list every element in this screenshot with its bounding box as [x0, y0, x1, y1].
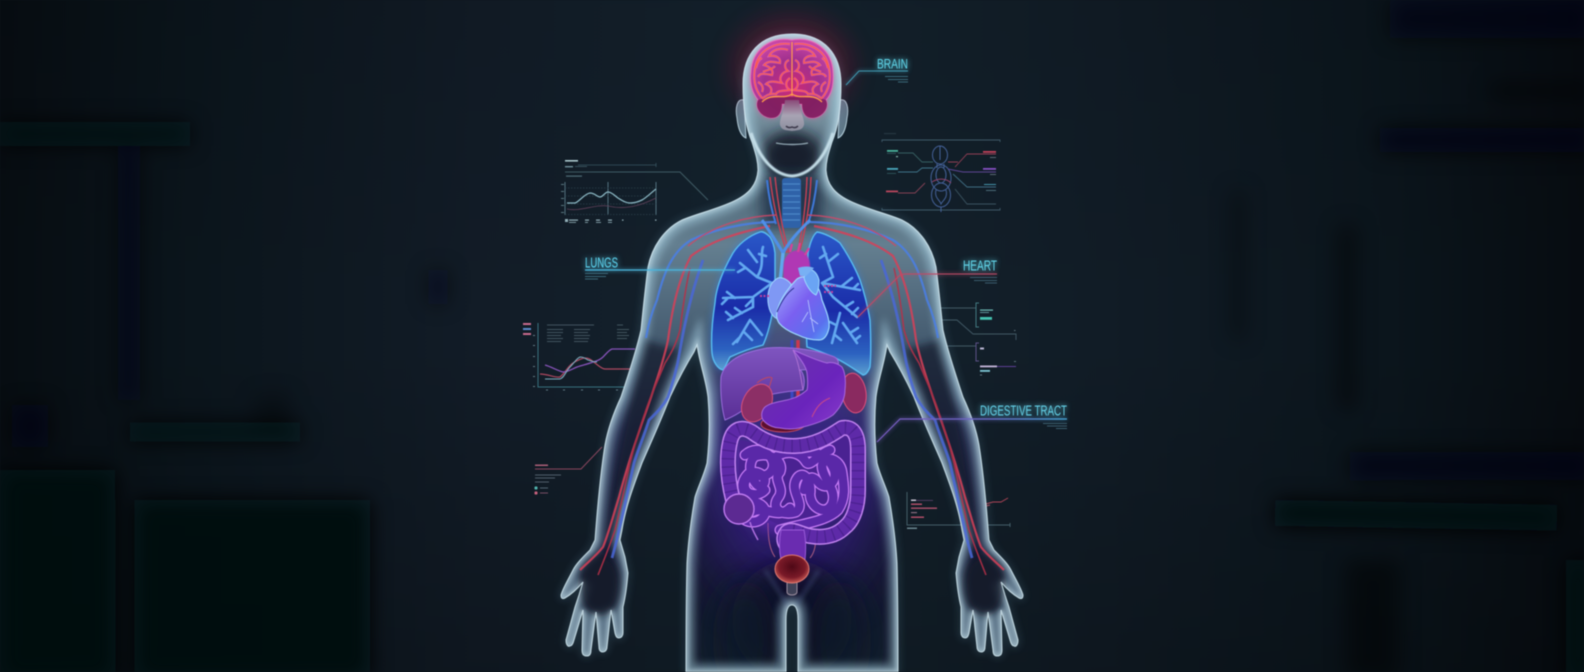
- left lung: [712, 232, 775, 370]
- neck vessels and trachea: [767, 177, 817, 253]
- panel: multi-line chart, middle left: [523, 323, 636, 390]
- callout: HEART: [858, 258, 997, 317]
- panel: readouts, middle right: [940, 303, 1016, 376]
- organ: heart: [760, 243, 836, 340]
- organ: liver: [721, 347, 838, 420]
- arm vessels: [580, 215, 1004, 575]
- panel: legend, lower left: [534, 447, 602, 495]
- panel: system schematic, upper right: [882, 133, 1000, 212]
- cecum: [724, 494, 754, 524]
- small intestine: [743, 450, 844, 530]
- organ: kidneys: [735, 372, 869, 427]
- nose: [780, 100, 804, 131]
- panel: bar readout, lower right: [907, 492, 1010, 529]
- central vessels: [762, 220, 810, 402]
- callout: DIGESTIVE TRACT: DIGESTIVE TRACT: [980, 404, 1067, 420]
- callout: HEART: HEART: [963, 258, 997, 274]
- organ: lungs: [712, 232, 871, 375]
- callout: BRAIN: [846, 56, 908, 85]
- ears: [736, 100, 848, 138]
- ambient purple glow in abdomen: [702, 340, 878, 600]
- organ: intestines: [724, 428, 858, 560]
- organ: brain: [751, 39, 833, 118]
- organ: bladder: [775, 555, 809, 595]
- icon: mini body schematic: [931, 146, 951, 212]
- body silhouette: [561, 34, 1023, 672]
- rectum: [780, 530, 806, 560]
- callout: BRAIN: BRAIN: [877, 56, 908, 72]
- schematic labels and leader lines: [898, 153, 996, 204]
- panel: line chart, upper left: [561, 160, 708, 223]
- face details: chin rim and mouth: [751, 133, 833, 176]
- large intestine: [728, 428, 858, 548]
- bronchial branches: [722, 247, 860, 344]
- callout: LUNGS: LUNGS: [585, 256, 618, 272]
- dark palms: [580, 555, 620, 615]
- callout: DIGESTIVE TRACT: [877, 404, 1067, 442]
- organ: stomach: [761, 350, 845, 432]
- head glow: [734, 18, 850, 118]
- right lung: [806, 232, 871, 375]
- groin contour glow: [765, 570, 819, 604]
